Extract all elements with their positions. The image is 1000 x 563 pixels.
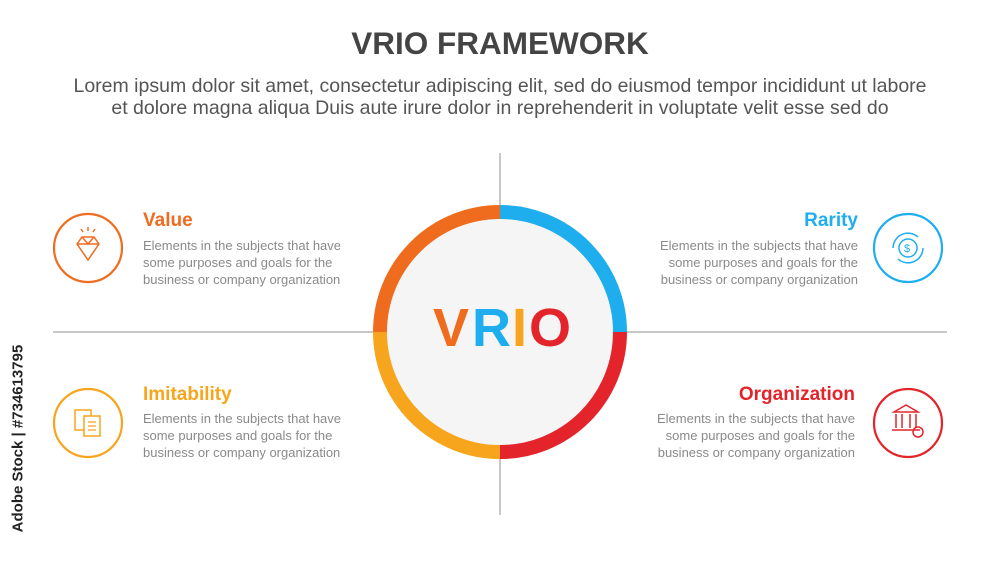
center circle: R bbox=[472, 298, 511, 358]
text: Rarity bbox=[804, 210, 858, 231]
text: Elements in the subjects that have bbox=[660, 238, 858, 253]
text: Imitability bbox=[143, 384, 232, 405]
text: some purposes and goals for the bbox=[669, 255, 858, 270]
text: Elements in the subjects that have bbox=[143, 411, 341, 426]
text: business or company organization bbox=[143, 445, 340, 460]
center circle: V bbox=[433, 298, 469, 358]
panel: value bbox=[143, 210, 341, 287]
panel: imitability bbox=[143, 384, 341, 460]
center circle: O bbox=[529, 298, 571, 358]
icon: coin rotation bbox=[874, 214, 942, 282]
icon: organization bbox=[874, 389, 942, 457]
center circle bbox=[380, 212, 620, 452]
text: business or company organization bbox=[143, 272, 340, 287]
text: business or company organization bbox=[658, 445, 855, 460]
text: business or company organization bbox=[661, 272, 858, 287]
icon: diamond bbox=[54, 214, 122, 282]
watermark text: Adobe Stock | #734613795 bbox=[10, 345, 26, 532]
icon: coin rotation: $ bbox=[904, 243, 910, 255]
text: Value bbox=[143, 210, 193, 231]
text: some purposes and goals for the bbox=[666, 428, 855, 443]
subtitle bbox=[73, 75, 927, 119]
text: Elements in the subjects that have bbox=[143, 238, 341, 253]
subtitle: Lorem ipsum dolor sit amet, consectetur adipiscing elit, sed do eiusmod tempor incididunt ut labore bbox=[73, 75, 927, 97]
panel: organization bbox=[657, 384, 855, 460]
panel: rarity bbox=[660, 210, 858, 287]
text: some purposes and goals for the bbox=[143, 255, 332, 270]
title: VRIO FRAMEWORK bbox=[351, 25, 649, 61]
icon: documents bbox=[54, 389, 122, 457]
text: Organization bbox=[739, 384, 855, 405]
text: some purposes and goals for the bbox=[143, 428, 332, 443]
center circle: I bbox=[512, 298, 527, 358]
text: Elements in the subjects that have bbox=[657, 411, 855, 426]
subtitle: et dolore magna aliqua Duis aute irure dolor in reprehenderit in voluptate velit esse sed do bbox=[111, 97, 889, 119]
